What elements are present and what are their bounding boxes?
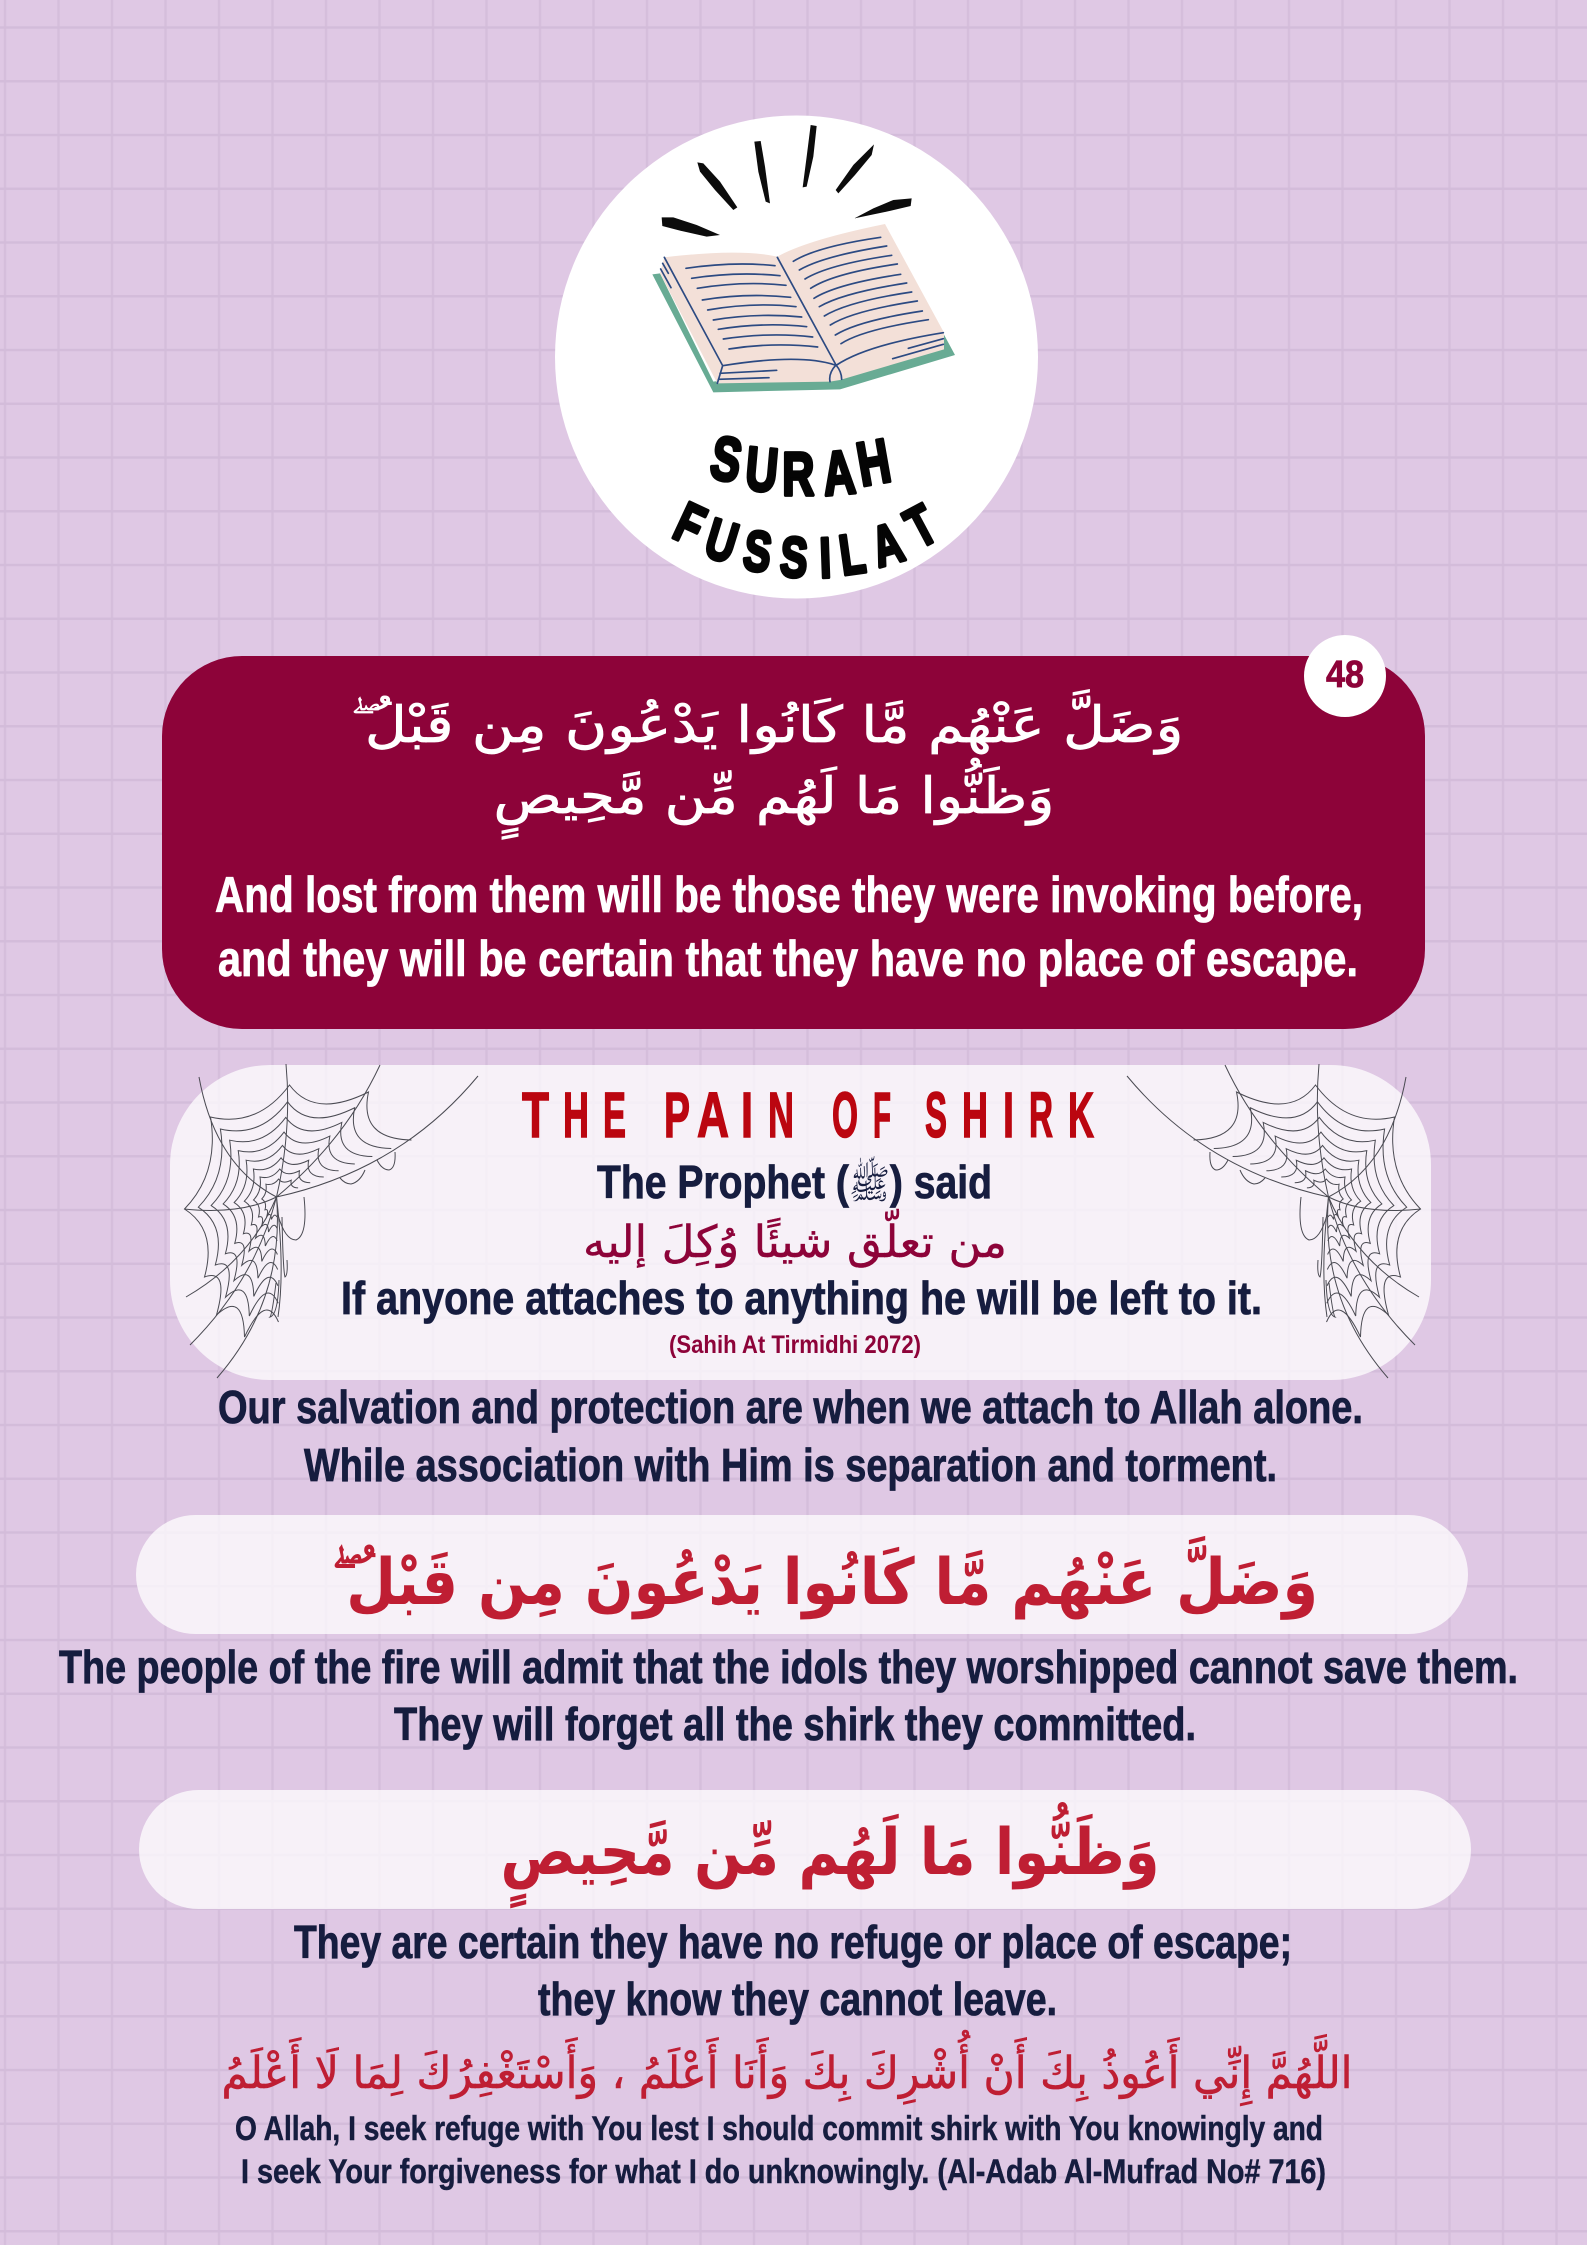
text: SURAH: R xyxy=(782,440,814,509)
heading: I xyxy=(741,1079,753,1151)
heading: P xyxy=(664,1079,690,1151)
text: FUSSILAT xyxy=(665,491,947,590)
text block: people of the fire xyxy=(59,1641,1518,1750)
heading: T xyxy=(522,1079,549,1151)
english translation xyxy=(215,867,1363,987)
verse number badge: 48 xyxy=(1326,654,1364,696)
text: the prophet said: The Prophet (ﷺ) said xyxy=(597,1155,992,1208)
pill: arabic phrase one: وَضَلَّ عَنْهُم مَّا كَانُوا يَدْعُونَ مِن قَبْلُ ۖ xyxy=(332,1536,1318,1620)
pill: arabic phrase two: وَظَنُّوا مَا لَهُم مِّن مَّحِيصٍ xyxy=(500,1802,1160,1909)
heading xyxy=(522,1079,1094,1151)
text: FUSSILAT: S xyxy=(778,525,810,590)
heading: H xyxy=(962,1079,988,1151)
text: SURAH: H xyxy=(852,426,896,500)
heading: F xyxy=(873,1079,891,1151)
text block: no refuge: They are certain they have no refuge or place of escape; xyxy=(294,1916,1292,1968)
heading: A xyxy=(697,1079,729,1151)
text block: salvation: While association with Him is separation and torment. xyxy=(304,1439,1277,1491)
icon: spider web right xyxy=(1127,1064,1421,1378)
text block: salvation: Our salvation and protection are when we attach to Allah alone. xyxy=(218,1381,1363,1433)
text: SURAH xyxy=(706,423,896,509)
heading: N xyxy=(768,1079,794,1151)
heading: K xyxy=(1068,1079,1094,1151)
rays xyxy=(662,125,912,237)
text block: dua translation: I seek Your forgiveness for what I do unknowingly. (Al-Adab Al-Mufrad No# 716) xyxy=(241,2153,1326,2191)
icon: open book xyxy=(652,125,955,392)
heading: I xyxy=(1003,1079,1014,1151)
icon: spider web left xyxy=(184,1064,478,1378)
text block: dua translation: O Allah, I seek refuge with You lest I should commit shirk with You knowingly and xyxy=(235,2110,1323,2148)
text: FUSSILAT: L xyxy=(836,522,869,588)
text block: no refuge: they know they cannot leave. xyxy=(538,1973,1057,2025)
verse number badge xyxy=(1304,635,1386,717)
arabic dua: اللَّهُمَّ إِنِّي أَعُوذُ بِكَ أَنْ أُشْرِكَ بِكَ وَأَنَا أَعْلَمُ ، وَأَسْتَغْفِرُكَ لِمَا لَا أَعْلَمُ xyxy=(222,2030,1352,2107)
heading: E xyxy=(603,1079,626,1151)
book pages xyxy=(660,224,944,383)
arabic verse: وَظَنُّوا مَا لَهُم مِّن مَّحِيصٍ xyxy=(494,758,1054,840)
pill: arabic phrase one xyxy=(136,1515,1468,1634)
book cover xyxy=(652,273,955,392)
panel: verse 48 xyxy=(162,635,1425,1029)
text: FUSSILAT: A xyxy=(865,511,910,580)
panel: the pain of shirk xyxy=(170,1064,1431,1380)
text block: dua translation xyxy=(235,2110,1326,2191)
text: FUSSILAT: U xyxy=(698,507,745,576)
text: FUSSILAT: I xyxy=(819,527,832,590)
panel background xyxy=(170,1065,1431,1380)
text: FUSSILAT: F xyxy=(665,491,714,558)
text block: no refuge xyxy=(294,1916,1292,2025)
arabic verse xyxy=(350,689,1184,840)
badge: surah title xyxy=(555,116,1038,598)
pill: arabic phrase two xyxy=(139,1790,1471,1909)
arabic verse: وَضَلَّ عَنْهُم مَّا كَانُوا يَدْعُونَ مِن قَبْلُ ۖ xyxy=(350,689,1184,755)
white circle xyxy=(555,116,1038,598)
arabic hadith: من تعلّق شيئًا وُكِلَ إليه xyxy=(583,1209,1007,1268)
english hadith: If anyone attaches to anything he will be left to it. xyxy=(341,1272,1262,1324)
heading: O xyxy=(832,1079,858,1151)
heading: H xyxy=(563,1079,589,1151)
text: SURAH: U xyxy=(743,434,781,506)
heading: R xyxy=(1029,1079,1053,1151)
text: FUSSILAT: S xyxy=(740,519,776,585)
text: FUSSILAT: T xyxy=(895,493,947,560)
text block: salvation xyxy=(218,1381,1363,1491)
text: SURAH: A xyxy=(820,438,858,509)
book lines xyxy=(661,237,943,383)
english translation: and they will be certain that they have no place of escape. xyxy=(218,931,1358,987)
hadith source: (Sahih At Tirmidhi 2072) xyxy=(669,1331,921,1359)
text: SURAH: S xyxy=(706,423,747,496)
text block: people of the fire: They will forget all the shirk they committed. xyxy=(394,1698,1196,1750)
panel background xyxy=(162,656,1425,1029)
heading: S xyxy=(925,1079,947,1151)
